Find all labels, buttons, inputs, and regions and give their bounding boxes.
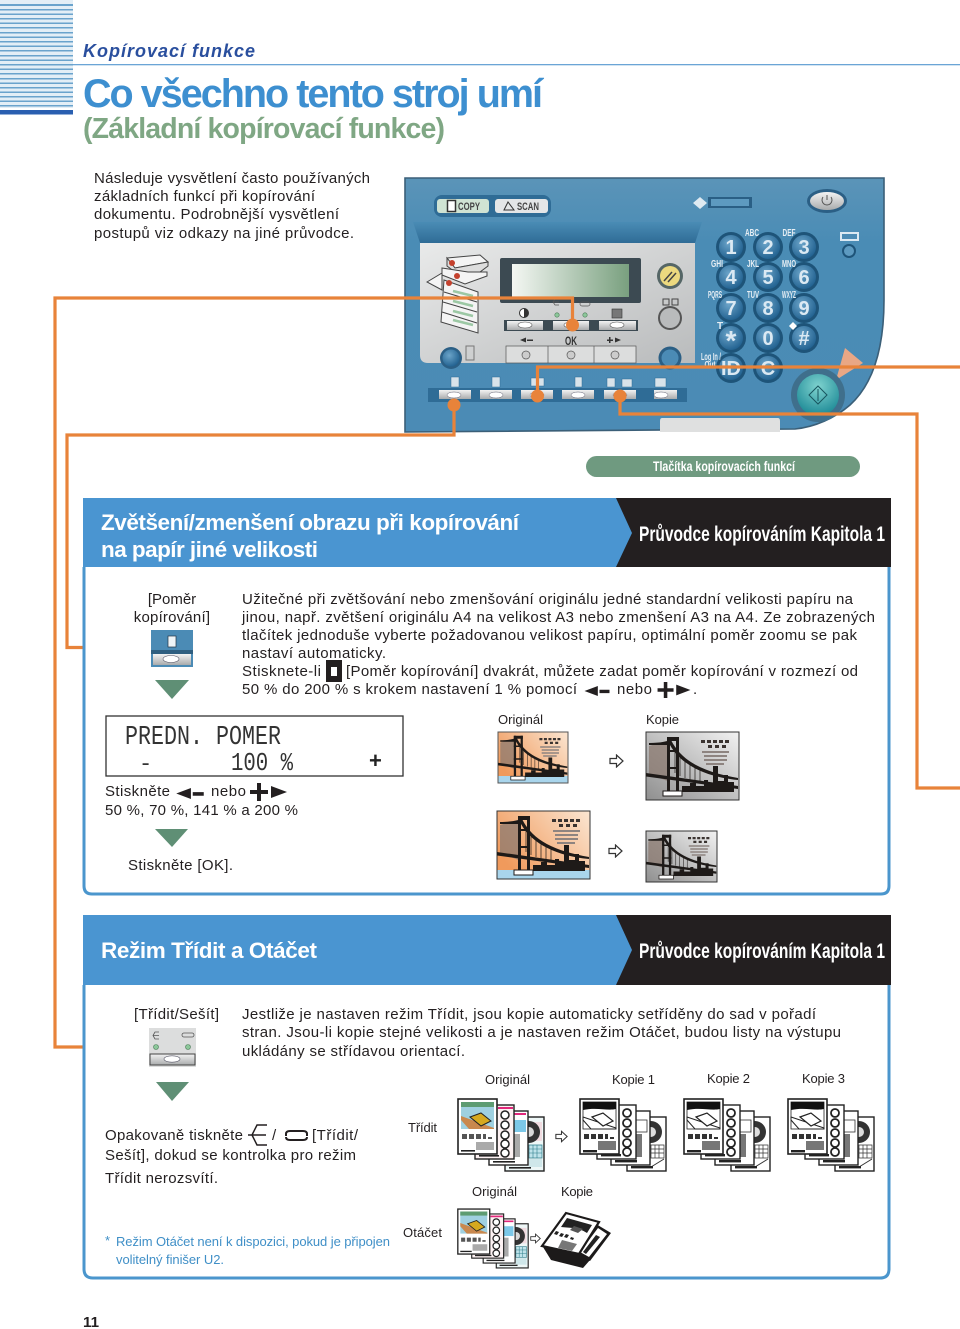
LCD display: PREDN. POMER xyxy=(125,723,281,753)
numeric keypad: 2 xyxy=(762,237,774,259)
step instructions: Stiskněte xyxy=(105,783,170,800)
connector: two-sided button off page xyxy=(538,367,960,396)
connector: collate button to section two xyxy=(55,298,572,1047)
connector dots xyxy=(448,318,626,412)
OK row: OK xyxy=(565,334,577,348)
image: copy set two xyxy=(684,1099,770,1171)
collate button label: [Třídit/Sešít] xyxy=(134,1006,219,1023)
zoom description text: Stisknete-li xyxy=(242,663,321,680)
icon: collate button xyxy=(149,1028,196,1067)
LCD display: - xyxy=(139,752,152,777)
connector: frame erase button off page xyxy=(620,396,960,788)
label: original: Originál xyxy=(498,712,543,727)
step instructions: 50 %, 70 %, 141 % a 200 % xyxy=(105,802,298,819)
numeric keypad xyxy=(701,228,859,383)
ratio button label: kopírování] xyxy=(134,609,210,626)
zoom description text: Užitečné při zvětšování nebo zmenšování originálu jedné standardní velikosti papíru na xyxy=(242,591,854,608)
COPY and SCAN buttons: COPY xyxy=(458,201,480,213)
copier icon xyxy=(427,255,488,333)
collate description text: ukládány se střídavou orientací. xyxy=(242,1043,465,1060)
image: copy set one xyxy=(580,1099,666,1171)
LCD display: 100 % xyxy=(231,748,293,778)
footnote xyxy=(105,1233,390,1267)
labels: collate columns: Kopie 1 xyxy=(612,1072,655,1087)
image: small original xyxy=(498,732,568,783)
icon: ratio button xyxy=(151,630,193,667)
control panel illustration xyxy=(405,178,884,432)
zoom heading banner: Zvětšení/zmenšení obrazu při kopírování xyxy=(101,510,520,535)
header stripes xyxy=(0,0,73,114)
footnote: Režim Otáčet není k dispozici, pokud je připojen xyxy=(116,1234,390,1249)
numeric keypad: 1 xyxy=(725,237,737,259)
numeric keypad: DEF xyxy=(782,228,796,239)
zoom description text xyxy=(241,591,875,698)
arrow: next step xyxy=(155,829,188,847)
footnote: * xyxy=(105,1233,110,1248)
section label: Kopírovací funkce xyxy=(83,41,255,61)
image: rotated copies xyxy=(542,1213,611,1268)
zoom description text: . xyxy=(693,681,697,698)
copy function buttons pill: Tlačítka kopírovacích funkcí xyxy=(653,458,796,474)
arrow: step down xyxy=(155,680,189,699)
image: small colour stack xyxy=(458,1209,528,1268)
collate description text: Jestliže je nastaven režim Třídit, jsou kopie automaticky setříděny do sad v pořadí xyxy=(242,1006,817,1023)
panel: zoom ratio xyxy=(83,498,891,894)
numeric keypad: C xyxy=(761,358,775,380)
numeric keypad: 8 xyxy=(762,298,774,320)
numeric keypad: TUV xyxy=(747,290,759,301)
numeric keypad: Out xyxy=(704,360,716,371)
panel: collate and rotate xyxy=(83,915,891,1278)
numeric keypad: GHI xyxy=(711,259,723,270)
press OK: Stiskněte [OK]. xyxy=(128,857,233,874)
zoom heading banner xyxy=(83,498,891,567)
zoom heading banner: na papír jiné velikosti xyxy=(101,537,318,562)
repeat press instructions: / xyxy=(272,1127,277,1144)
title: Co všechno tento stroj umí xyxy=(83,72,545,116)
labels: rotate columns: Originál xyxy=(472,1184,517,1199)
connector: ratio button to section one xyxy=(67,405,454,648)
numeric keypad: ABC xyxy=(745,228,759,239)
energy and power buttons xyxy=(693,189,847,213)
label: copy: Kopie xyxy=(646,712,679,727)
copy function buttons pill xyxy=(586,456,860,477)
numeric keypad: T xyxy=(717,321,723,332)
intro text xyxy=(94,170,370,242)
step instructions: nebo xyxy=(211,783,246,800)
image: large original xyxy=(497,811,590,879)
start button xyxy=(791,348,863,422)
numeric keypad: 4 xyxy=(725,267,737,289)
arrow: rotate xyxy=(531,1234,540,1243)
repeat press instructions xyxy=(105,1125,359,1187)
collate heading banner xyxy=(83,915,891,985)
panel buttons upper row xyxy=(504,320,638,331)
image: enlarged copy xyxy=(646,732,739,800)
intro text: dokumentu. Podrobnější vysvětlení xyxy=(94,206,340,223)
right side function keys xyxy=(657,263,683,289)
labels: collate columns: Originál xyxy=(485,1072,530,1087)
arrow: enlarge xyxy=(610,755,623,767)
numeric keypad: MNO xyxy=(782,259,796,270)
numeric keypad: PQRS xyxy=(708,290,722,301)
COPY and SCAN buttons xyxy=(434,195,551,217)
numeric keypad: WXYZ xyxy=(782,290,796,301)
zoom description text: 50 % do 200 % s krokem nastavení 1 % pomocí xyxy=(242,681,578,698)
intro text: Následuje vysvětlení často používaných xyxy=(94,170,370,187)
arrow: to copies xyxy=(556,1131,567,1142)
step instructions xyxy=(105,783,298,819)
numeric keypad: # xyxy=(798,328,810,350)
footnote: volitelný finišer U2. xyxy=(116,1252,224,1267)
labels: collate columns: Kopie 2 xyxy=(707,1071,750,1086)
numeric keypad: JKL xyxy=(747,259,759,270)
numeric keypad: 6 xyxy=(798,267,810,289)
intro text: základních funkcí při kopírování xyxy=(94,188,316,205)
repeat press instructions: [Třídit/ xyxy=(312,1127,359,1144)
labels: rotate columns: Kopie xyxy=(561,1184,593,1199)
header rule xyxy=(73,64,960,65)
numeric keypad: 5 xyxy=(762,267,774,289)
labels: collate columns xyxy=(485,1071,845,1087)
labels: rotate columns xyxy=(472,1184,593,1199)
label: rotate: Otáčet xyxy=(403,1225,442,1240)
numeric keypad: 0 xyxy=(762,328,774,350)
zoom description text: jinou, např. zvětšení originálu A4 na velikost A3 nebo zmenšení A3 na A4. Ze zobrazených xyxy=(241,609,875,626)
grey operation panel xyxy=(420,243,695,370)
zoom description text: nebo xyxy=(617,681,652,698)
LCD display xyxy=(106,716,403,778)
paper slot xyxy=(660,418,780,432)
LCD display: + xyxy=(369,748,382,773)
ratio button label xyxy=(134,591,210,626)
arrow: reduce xyxy=(609,845,622,857)
arrow: step down xyxy=(156,1082,189,1101)
numeric keypad: 9 xyxy=(798,298,810,320)
zoom description text: nastaví automaticky. xyxy=(242,645,386,662)
zoom description text: tlačítek jednoduše vyberte požadovanou velikost papíru, optimální poměr zoomu se pak xyxy=(242,627,858,644)
image: reduced copy xyxy=(646,831,717,882)
intro text: postupů viz odkazy na jiné průvodce. xyxy=(94,225,354,242)
ratio button label: [Poměr xyxy=(148,591,196,608)
numeric keypad: 3 xyxy=(798,237,810,259)
repeat press instructions: Sešít], dokud se kontrolka pro režim xyxy=(105,1147,356,1164)
COPY and SCAN buttons: SCAN xyxy=(517,201,539,213)
numeric keypad: ID xyxy=(721,358,741,380)
subtitle: (Základní kopírovací funkce) xyxy=(83,113,445,145)
image: copy set three xyxy=(788,1099,874,1171)
label: collate: Třídit xyxy=(408,1120,437,1135)
labels: collate columns: Kopie 3 xyxy=(802,1071,845,1086)
collate heading banner: Režim Třídit a Otáčet xyxy=(101,938,318,963)
numeric keypad: 7 xyxy=(725,298,737,320)
function button strip xyxy=(428,377,687,402)
collate description text xyxy=(242,1006,841,1060)
numeric keypad: * xyxy=(726,325,737,356)
repeat press instructions: Opakovaně tiskněte xyxy=(105,1127,243,1144)
zoom description text: [Poměr kopírování] dvakrát, můžete zadat poměr kopírování v rozmezí od xyxy=(346,663,858,680)
repeat press instructions: Třídit nerozsvítí. xyxy=(105,1170,218,1187)
collate description text: stran. Jsou-li kopie stejné velikosti a je nastaven režim Otáčet, budou listy na výstupu xyxy=(242,1024,841,1041)
numeric keypad: Log In / xyxy=(701,352,721,363)
image: colour original stack xyxy=(458,1099,544,1171)
